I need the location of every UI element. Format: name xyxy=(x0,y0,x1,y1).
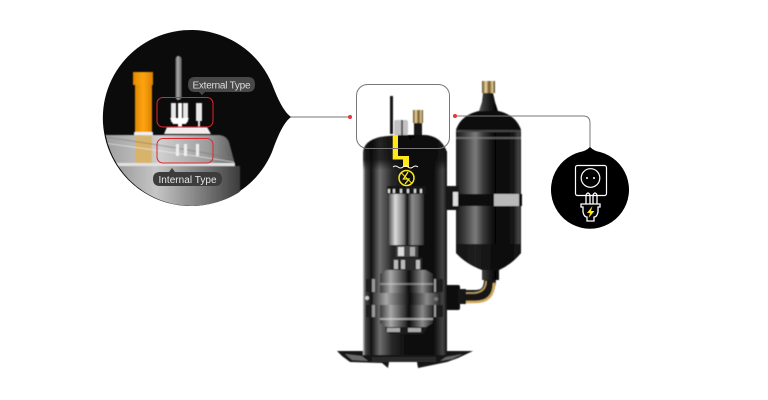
label: Internal Type xyxy=(153,168,222,186)
infographic: compressor terminal types xyxy=(102,30,629,369)
motor stator xyxy=(387,186,426,245)
label: External Type: External Type xyxy=(192,80,251,92)
socket xyxy=(576,166,606,196)
highlight: external terminals xyxy=(157,98,213,127)
yellow electric path xyxy=(393,135,409,167)
compressor assembly xyxy=(337,81,522,368)
panel: zoom callout of terminal types xyxy=(100,30,291,210)
bracket between shell and accumulator xyxy=(437,184,459,212)
connector line: accumulator to power icon xyxy=(453,114,590,148)
label: Internal Type: Internal Type xyxy=(158,175,217,186)
label: External Type xyxy=(188,77,255,95)
terminal highlight box xyxy=(356,84,450,148)
base mounting feet xyxy=(337,351,473,368)
shaft and windings xyxy=(390,246,422,270)
connector line: zoom callout to terminal box xyxy=(290,115,352,119)
icon: water line xyxy=(393,166,418,168)
highlight: internal terminals xyxy=(157,138,213,163)
icon: external terminals xyxy=(170,103,202,127)
rotary pump xyxy=(365,270,443,334)
shell dome shading xyxy=(363,135,447,170)
icon: power socket and plug xyxy=(551,147,629,229)
icon: antenna rod xyxy=(176,56,182,100)
icon: orange pipe xyxy=(133,72,153,136)
mounting strap xyxy=(456,194,522,206)
housing of compressor top xyxy=(100,135,240,210)
icon: terminal base xyxy=(164,127,211,134)
icon: no electricity symbol xyxy=(399,170,414,186)
compressor shell xyxy=(363,135,447,355)
lightning bolt xyxy=(587,206,594,218)
plug xyxy=(581,193,600,221)
antenna and brass terminal xyxy=(390,96,423,135)
accumulator pipe xyxy=(443,279,494,310)
accumulator tank xyxy=(456,81,522,280)
icon: internal terminals xyxy=(176,144,199,156)
